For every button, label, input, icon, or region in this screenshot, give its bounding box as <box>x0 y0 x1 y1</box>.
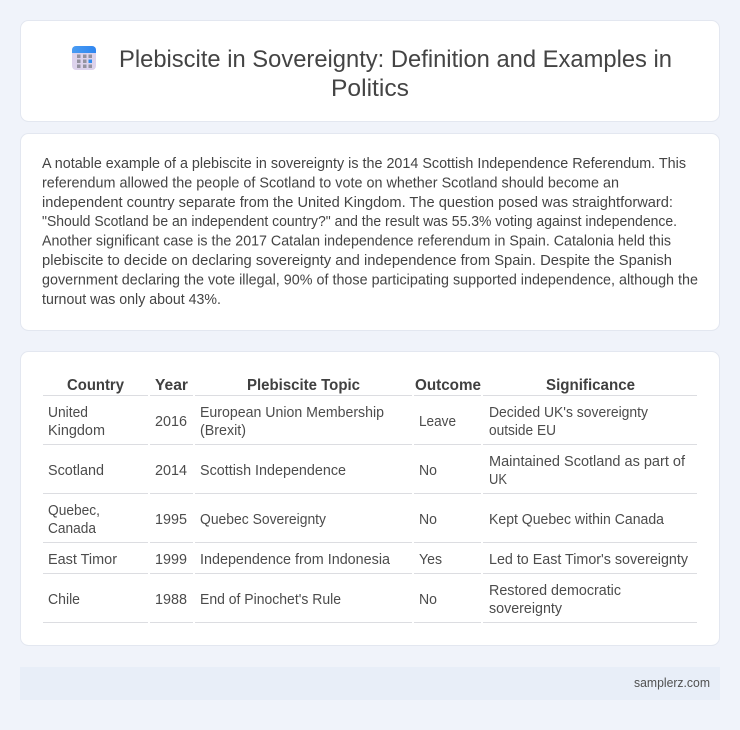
text block: description: referendum allowed the people of Scotland to vote on whether Scotland should become an <box>42 176 619 192</box>
table row: Scotland: Maintained Scotland as part of <box>489 454 686 470</box>
table row: East Timor <box>48 552 689 568</box>
text block: description: A notable example of a plebiscite in sovereignty is the 2014 Scottish Independence Referendum. This <box>42 156 686 172</box>
table row: East Timor: Led to East Timor's sovereignty <box>489 552 689 568</box>
text block: description: plebiscite to decide on declaring sovereignty and independence from Spain. Despite the Spanish <box>42 253 672 269</box>
panel: plebiscite table <box>20 352 720 646</box>
table row: United Kingdom: (Brexit) <box>200 423 246 439</box>
table row: United Kingdom: Kingdom <box>48 423 105 439</box>
table row: Quebec, Canada: Kept Quebec within Canada <box>489 512 665 528</box>
table row: United Kingdom: European Union Membership <box>200 405 384 421</box>
table row: East Timor: East Timor <box>48 552 117 568</box>
table row: Chile: Chile <box>48 592 80 608</box>
text block: description: government declaring the vote illegal, 90% of those participating supported independence, although the <box>42 272 698 288</box>
table row: Chile: 1988 <box>155 592 187 608</box>
table header: Outcome <box>415 377 481 394</box>
table header <box>67 377 635 394</box>
table row: Chile: No <box>419 592 437 608</box>
footer bar <box>20 667 720 700</box>
table header: Year <box>155 377 188 394</box>
table row: Chile: Restored democratic <box>489 583 621 599</box>
table header: Country <box>67 377 124 394</box>
table row: Scotland: UK <box>489 472 507 488</box>
table row: Scotland: 2014 <box>155 463 187 479</box>
title: Plebiscite in Sovereignty: Definition and Examples in <box>119 46 672 73</box>
table row: East Timor: Independence from Indonesia <box>200 552 391 568</box>
text block: description: Another significant case is the 2017 Catalan independence referendum in Spain. Catalonia held this <box>42 234 671 250</box>
table row: Quebec, Canada: Quebec Sovereignty <box>200 512 327 528</box>
title <box>119 46 672 102</box>
table row: Quebec, Canada: 1995 <box>155 512 187 528</box>
table row: Scotland: Scottish Independence <box>200 463 346 479</box>
table row: Chile: End of Pinochet's Rule <box>200 592 341 608</box>
table row: United Kingdom: Leave <box>419 414 456 430</box>
table row: United Kingdom: United <box>48 405 88 421</box>
title: Politics <box>331 75 409 102</box>
table header: Plebiscite Topic <box>247 377 360 394</box>
text block: description <box>42 156 698 308</box>
table header: Significance <box>546 377 635 394</box>
panel: description text <box>20 134 720 330</box>
table row: Scotland: Scotland <box>48 463 104 479</box>
table row: Scotland: No <box>419 463 437 479</box>
table row: Scotland <box>48 454 686 488</box>
table row: Quebec, Canada <box>48 503 665 537</box>
table row: Quebec, Canada: Canada <box>48 521 97 537</box>
footer text: samplerz.com <box>634 675 710 690</box>
text block: description: turnout was only about 43%. <box>42 292 221 308</box>
table row: United Kingdom <box>48 405 649 439</box>
text block: description: independent country separate from the United Kingdom. The question posed was straightforward: <box>42 195 673 211</box>
text block: description: "Should Scotland be an independent country?" and the result was 55.3% voting against independence. <box>42 214 677 230</box>
table row: East Timor: 1999 <box>155 552 187 568</box>
table row: United Kingdom: outside EU <box>489 423 556 439</box>
panel: title header <box>20 20 720 122</box>
table row: United Kingdom: 2016 <box>155 414 187 430</box>
table row: United Kingdom: Decided UK's sovereignty <box>489 405 649 421</box>
table row: Chile: sovereignty <box>489 601 563 617</box>
table row: Quebec, Canada: Quebec, <box>48 503 100 519</box>
table row: Chile <box>48 583 621 617</box>
table row: East Timor: Yes <box>419 552 442 568</box>
icon: calendar <box>72 46 96 70</box>
table row: Quebec, Canada: No <box>419 512 437 528</box>
